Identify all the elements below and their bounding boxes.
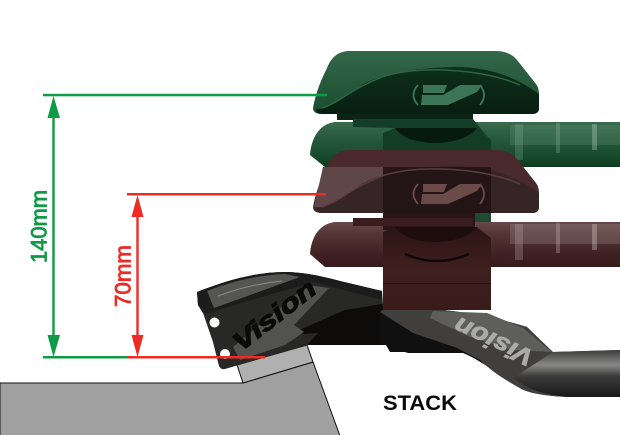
green clamp — [337, 112, 491, 150]
red 70mm dimension — [110, 193, 326, 358]
grey decal band — [430, 311, 552, 352]
bike frame — [0, 345, 340, 435]
Vision wordmark: Vision — [227, 274, 322, 357]
red arrow — [132, 195, 144, 357]
green arm pad — [313, 51, 539, 114]
grey decal band — [233, 285, 329, 360]
label 70mm: 70mm — [110, 245, 136, 307]
green arm bar — [310, 122, 620, 167]
green V logo — [414, 85, 484, 105]
green stem — [383, 128, 491, 223]
label 140mm: 140mm — [26, 190, 52, 263]
maroon arm bar — [310, 222, 620, 267]
maroon stem — [383, 212, 491, 310]
mirrored Vision wordmark: Vision — [450, 311, 538, 371]
mounting holes — [210, 318, 230, 359]
green high position: tall stack — [310, 51, 620, 223]
STACK label: STACK — [383, 391, 457, 415]
armrest base with Vision logo — [197, 272, 386, 369]
green 140mm dimension — [26, 94, 327, 359]
maroon low position: short stack — [310, 150, 620, 310]
maroon V logo — [414, 184, 484, 204]
aerobar extension — [380, 306, 620, 397]
maroon clamp — [353, 218, 473, 226]
green arrow — [48, 96, 60, 357]
maroon arm pad — [313, 150, 539, 213]
